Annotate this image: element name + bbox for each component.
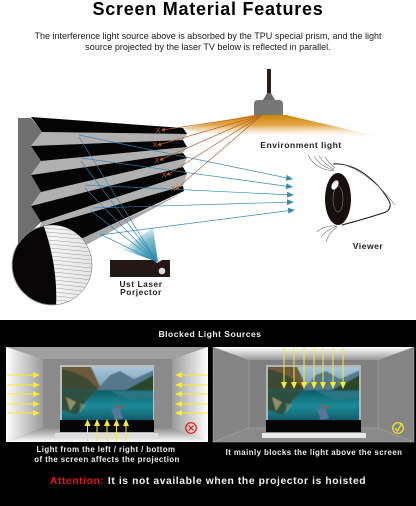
caption: left room: Light from the left / right / bottom — [37, 445, 175, 454]
label: environment light: Environment light — [260, 140, 342, 150]
label: projector: Ust Laser — [119, 279, 163, 289]
projector light beam — [112, 228, 158, 262]
intro text: The interference light source above is absorbed by the TPU special prism, and the light — [34, 31, 382, 41]
attention note: Attention: It is not available when the projector is hoisted — [50, 476, 366, 487]
intro text — [34, 31, 382, 52]
caption: right room: It mainly blocks the light above the screen — [226, 448, 402, 457]
heading: blocked light sources: Blocked Light Sources — [158, 329, 262, 339]
label: projector — [119, 279, 163, 297]
absorbed marks: X — [162, 172, 167, 179]
reflected rays — [79, 135, 294, 262]
icon: cross mark — [186, 423, 196, 433]
arrows: side and bottom light — [7, 375, 208, 441]
absorbed marks: X — [171, 186, 176, 193]
icon: UST laser projector — [110, 260, 170, 277]
prism screen wedge — [18, 117, 187, 250]
absorbed rays — [158, 115, 262, 189]
icon: eye — [308, 155, 395, 242]
panel: blocked light sources — [0, 320, 416, 506]
absorbed marks: X — [153, 142, 158, 149]
icon: ceiling lamp — [254, 69, 283, 115]
caption: left room — [34, 445, 180, 464]
icon: check mark — [393, 423, 403, 433]
absorbed marks: X — [155, 158, 160, 165]
absorbed marks — [153, 128, 176, 193]
environment light — [183, 115, 385, 138]
icon: projector lens — [159, 268, 165, 274]
label: viewer: Viewer — [353, 241, 383, 251]
magnified prism detail — [10, 224, 94, 306]
room: light above — [213, 347, 414, 442]
arrows: light above — [284, 347, 343, 388]
intro text: source projected by the laser TV below is reflected in parallel. — [85, 42, 331, 52]
room: side and bottom light — [6, 347, 208, 442]
absorbed marks: X — [156, 128, 161, 135]
label: projector: Porjector — [120, 287, 162, 297]
caption: left room: of the screen affects the projection — [34, 455, 180, 464]
